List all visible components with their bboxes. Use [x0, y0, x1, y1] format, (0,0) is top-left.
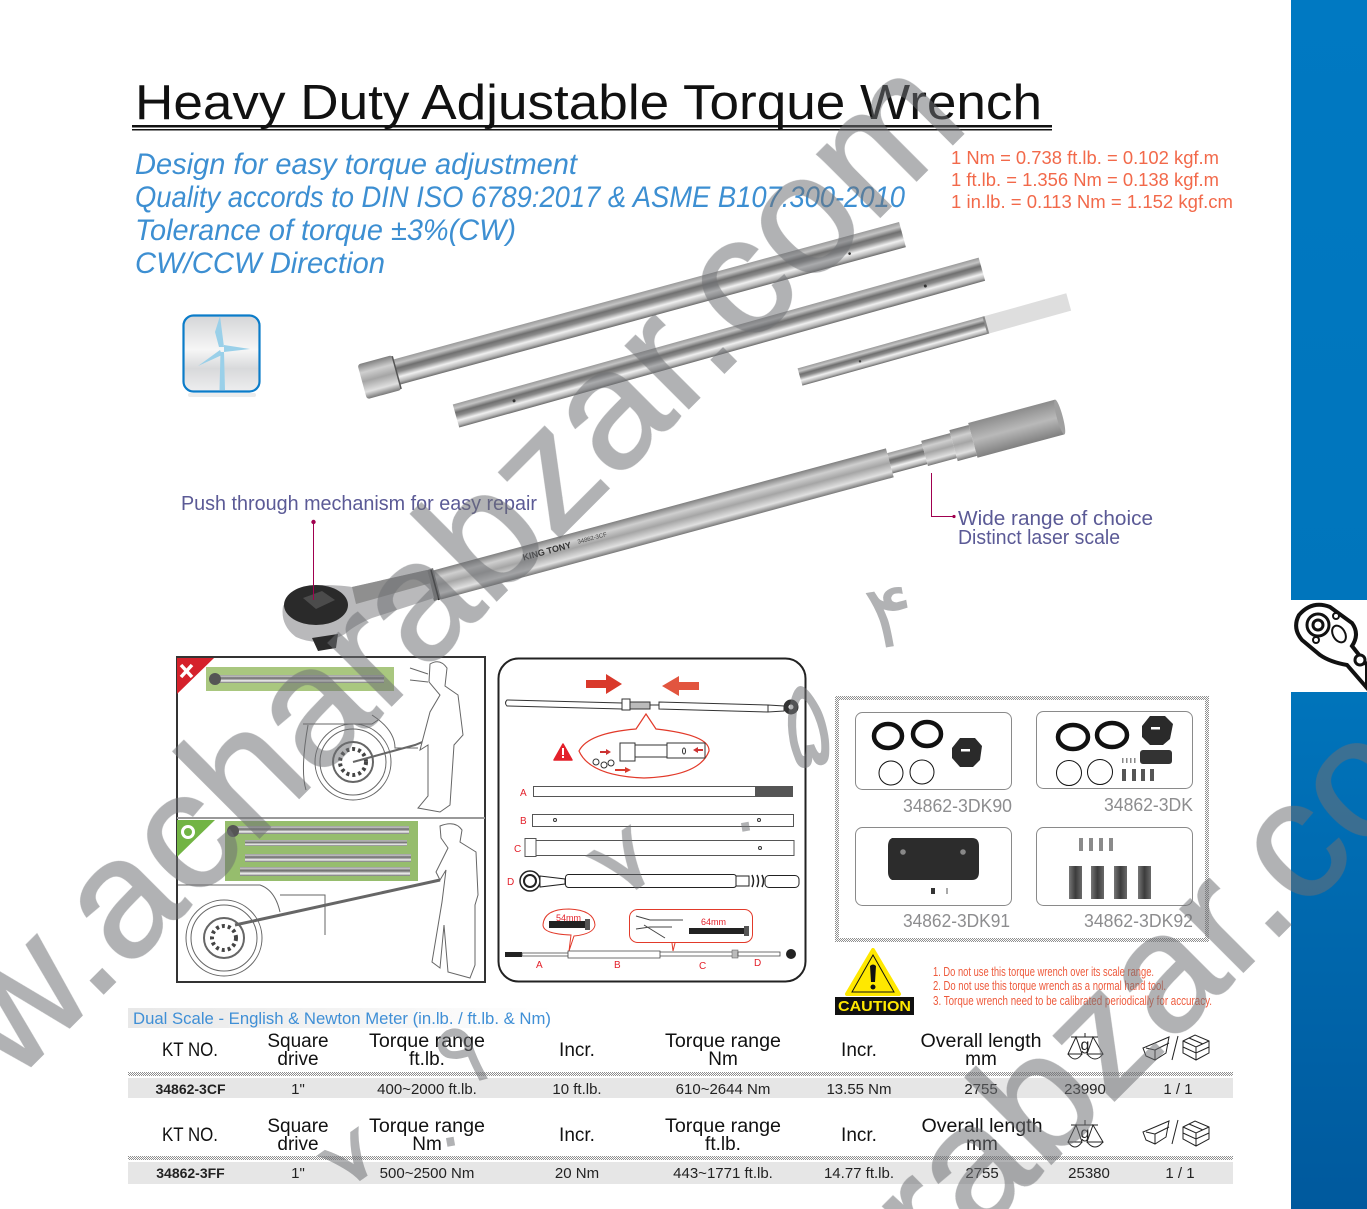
header row 1: Torque range [665, 1031, 781, 1052]
feature list: Quality accords to DIN ISO 6789:2017 & ASME B107.300-2010 [135, 181, 905, 214]
header row 2: Square [267, 1116, 329, 1137]
product: handle tube with knurl [798, 293, 1071, 386]
kit: 34862-3DK [1036, 712, 1193, 815]
bubble: 54mm bolt [543, 909, 595, 951]
caution notes [933, 964, 1212, 1008]
header row 1: Incr. [559, 1040, 595, 1061]
part D [507, 871, 799, 891]
watermark: Persian digits: ۹ [424, 1000, 497, 1109]
data row 1: 13.55 Nm [826, 1081, 892, 1098]
caution notes: 3. Torque wrench need to be calibrated periodically for accuracy. [933, 993, 1212, 1008]
watermark: Persian digits: ۵ [770, 651, 842, 797]
part C: C [514, 844, 521, 855]
product marking: KING TONY [522, 540, 572, 563]
kit: 34862-3DK91 [856, 828, 1012, 931]
watermark: Persian digits: ۰ [719, 780, 771, 866]
table: 34862-3FF [128, 1116, 1233, 1184]
callout: push through mechanism: Push through mechanism for easy repair [181, 493, 537, 515]
header row 2: ft.lb. [705, 1134, 741, 1155]
header row 2: mm [966, 1134, 998, 1155]
wrench outline: bottom assembled [505, 949, 796, 972]
wrong usage: red corner mark [177, 658, 214, 694]
icon: caution sign [835, 950, 914, 1015]
kit: 34862-3DK91: 34862-3DK91 [903, 911, 1010, 931]
data row 1: 400~2000 ft.lb. [377, 1081, 477, 1098]
unit conversions: 1 in.lb. = 0.113 Nm = 1.152 kgf.cm [951, 192, 1233, 212]
wrench outline: bottom assembled: C [699, 961, 706, 972]
data row 1: 34862-3CF [155, 1081, 226, 1097]
table heading: Dual Scale - English & Newton Meter (in.lb. / ft.lb. & Nm) [133, 1009, 551, 1028]
header row 1: drive [277, 1049, 319, 1070]
data row 2: 443~1771 ft.lb. [673, 1165, 773, 1182]
data row 1 [155, 1081, 1193, 1098]
watermark: Persian digits: ۰ [424, 1095, 476, 1181]
title rule [132, 125, 1052, 130]
feature list: Design for easy torque adjustment [135, 148, 579, 181]
data row 2: 1 / 1 [1165, 1165, 1195, 1182]
right usage: wheel and mechanic [178, 824, 478, 978]
part B [520, 814, 794, 827]
caution notes: 2. Do not use this torque wrench as a normal hand tool. [933, 978, 1166, 993]
part B: B [520, 816, 527, 827]
kit: 34862-3DK: 34862-3DK [1104, 795, 1193, 815]
callout: push through mechanism [181, 493, 537, 600]
caution notes: 1. Do not use this torque wrench over its scale range. [933, 964, 1154, 979]
kit: 34862-3DK90 [856, 712, 1012, 816]
kit: 34862-3DK90: 34862-3DK90 [903, 796, 1012, 816]
header row 2: Nm [412, 1134, 442, 1155]
header row 1: Torque range [369, 1031, 485, 1052]
data row 2: 1" [291, 1165, 305, 1182]
panel: repair kits [837, 698, 1207, 940]
wrench outline: assembled [506, 699, 798, 714]
data row 2: 20 Nm [555, 1165, 599, 1182]
icon: weight scale row 1 [1068, 1033, 1103, 1059]
icon: weight scale row 2 [1068, 1120, 1103, 1147]
feature list: CW/CCW Direction [135, 247, 385, 280]
unit conversions: 1 ft.lb. = 1.356 Nm = 0.138 kgf.m [951, 170, 1219, 190]
header row 2: drive [277, 1134, 319, 1155]
icon: wind turbine badge [184, 316, 260, 397]
data row 1: 23990 [1064, 1081, 1106, 1098]
arrows: push together [586, 674, 699, 696]
watermark: Persian digits [303, 563, 923, 1208]
kit: 34862-3DK92 [1036, 828, 1193, 931]
header row 2: Incr. [559, 1125, 595, 1146]
icon: ratchet wrench tab [1296, 605, 1367, 688]
header row 2 [162, 1116, 1042, 1155]
header row 1: KT NO. [162, 1040, 218, 1061]
unit conversions [951, 148, 1233, 212]
data row 2: 14.77 ft.lb. [824, 1165, 894, 1182]
data row 2: 25380 [1068, 1165, 1110, 1182]
panel: wrong and right usage illustrations [177, 657, 485, 982]
data row 2: 34862-3FF [156, 1165, 225, 1181]
header row 2: Incr. [841, 1125, 877, 1146]
callout: wide range of choice: Wide range of choice [958, 508, 1153, 530]
data row 1: 1" [291, 1081, 305, 1098]
header row 1: Nm [708, 1049, 738, 1070]
wrench outline: bottom assembled: B [614, 960, 621, 971]
right usage: green corner mark [177, 820, 215, 857]
feature list [135, 148, 905, 280]
header row 1: mm [965, 1049, 997, 1070]
zoom bubble [579, 714, 709, 778]
icon: weight scale row 2: g [1081, 1125, 1089, 1142]
right usage: parts on green [225, 821, 418, 881]
wrong usage: short wrench on green [206, 667, 394, 691]
product: assembled torque wrench [283, 399, 1067, 651]
icon: box and carton row 1 [1143, 1035, 1209, 1060]
icon: warning triangle [554, 744, 572, 760]
bubble: 64mm bolt: 64mm [701, 917, 726, 927]
part D: D [507, 877, 514, 888]
data row 2 [156, 1165, 1195, 1182]
product: assembled torque wrench: 34862-3CF [577, 532, 608, 546]
header row 2: Overall length [922, 1116, 1042, 1137]
data row 2: 500~2500 Nm [380, 1165, 474, 1182]
wrong usage: wheel and mechanic [303, 662, 463, 812]
part A: A [520, 788, 527, 799]
part A [520, 786, 792, 799]
header row 2: KT NO. [162, 1125, 218, 1146]
header row 2: Torque range [665, 1116, 781, 1137]
icon: box and carton row 2 [1143, 1120, 1209, 1146]
header row 1: ft.lb. [409, 1049, 445, 1070]
bubble: 54mm bolt: 54mm [556, 913, 581, 923]
header row 1: Incr. [841, 1040, 877, 1061]
unit conversions: 1 Nm = 0.738 ft.lb. = 0.102 kgf.m [951, 148, 1219, 168]
callout: wide range of choice [932, 473, 1153, 549]
data row 1: 2755 [964, 1081, 998, 1098]
bubble: 64mm bolt [630, 910, 752, 951]
product: handle tube large [357, 218, 907, 399]
wrench outline: bottom assembled: A [536, 960, 543, 971]
wrench outline: bottom assembled: D [754, 958, 761, 969]
product: handle tube medium [453, 258, 985, 428]
header row 1: Overall length [920, 1031, 1042, 1052]
data row 1: 1 / 1 [1163, 1081, 1193, 1098]
header row 1: Square [267, 1031, 329, 1052]
icon: weight scale row 1: g [1081, 1037, 1089, 1054]
watermark: Persian digits: ۷ [303, 1109, 397, 1208]
header row 2: Torque range [369, 1116, 485, 1137]
kit: 34862-3DK92: 34862-3DK92 [1084, 911, 1193, 931]
feature list: Tolerance of torque ±3%(CW) [135, 214, 516, 247]
part C [514, 838, 794, 856]
watermark: Persian digits: ۷ [569, 803, 678, 921]
data row 1: 610~2644 Nm [676, 1081, 770, 1098]
table: 34862-3CF [128, 1031, 1233, 1098]
sidebar: blue section tab [1291, 0, 1367, 1209]
panel: assembly instructions [498, 658, 806, 982]
title: Heavy Duty Adjustable Torque Wrench [135, 76, 1042, 130]
data row 1: 10 ft.lb. [552, 1081, 602, 1098]
header row 1 [162, 1031, 1042, 1070]
icon: caution sign: CAUTION [838, 998, 911, 1015]
data row 2: 2755 [965, 1165, 999, 1182]
callout: wide range of choice: Distinct laser scale [958, 527, 1120, 549]
watermark: Persian digits: ۴ [858, 563, 923, 670]
